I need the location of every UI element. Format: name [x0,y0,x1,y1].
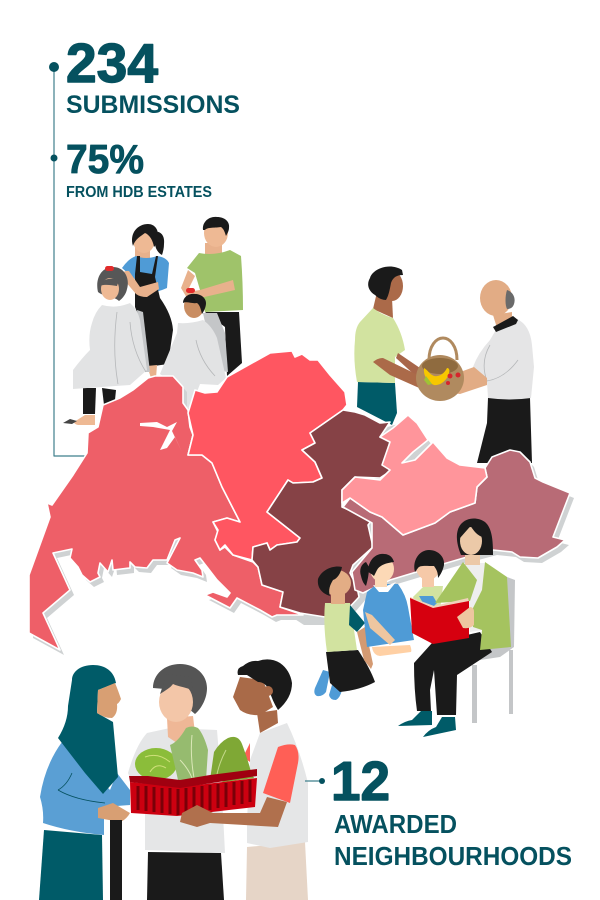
map of neighbourhood regions [29,351,570,650]
illustration: three neighbours with vegetable crate [39,659,308,900]
map shadow [33,381,574,655]
stat: 75% from HDB estates: 75% [66,136,144,182]
region: central [252,410,392,617]
woman in hijab [39,665,130,900]
stylist in green shirt [181,217,243,376]
stylist with ponytail [120,224,173,378]
woman with grey hair [128,664,225,900]
chair [472,577,515,723]
region: west [29,376,303,650]
stat: 234 submissions: SUBMISSIONS [66,91,240,119]
connector line: top stats [49,62,93,456]
illustration: hairdressers and seated customers [63,217,243,425]
arm holding crate [180,797,287,827]
elderly man in white shirt [440,280,534,463]
stat: 75% from HDB estates [66,136,212,201]
connector: bottom stat [305,778,325,784]
stat: 12 awarded neighbourhoods [331,750,572,871]
stat: 234 submissions: 234 [66,32,158,94]
seated child in white cape [160,288,226,424]
small child [413,550,444,612]
red book [410,597,474,644]
region: east [343,450,570,593]
region: north [188,351,347,560]
girl in blue dress [360,554,414,656]
seated woman in white cape [63,266,150,425]
stat: 12 awarded neighbourhoods: AWARDED [334,809,457,839]
vegetables [135,726,254,782]
illustration: man handing fruit basket to elderly man [354,266,534,463]
region: north-east [342,415,487,535]
mother with cardigan [398,518,511,737]
man in green T-shirt [354,266,429,425]
fruit basket [416,338,464,401]
stat: 234 submissions [66,32,240,119]
inlet in west region [140,422,182,452]
boy kneeling [314,566,375,700]
illustration: mother reading to children [314,518,515,737]
red crate [129,769,257,816]
stat: 75% from HDB estates: FROM HDB ESTATES [66,184,212,201]
stat: 12 awarded neighbourhoods: NEIGHBOURHOODS [334,841,572,871]
stat: 12 awarded neighbourhoods: 12 [331,750,390,812]
man in white vest [233,659,308,900]
